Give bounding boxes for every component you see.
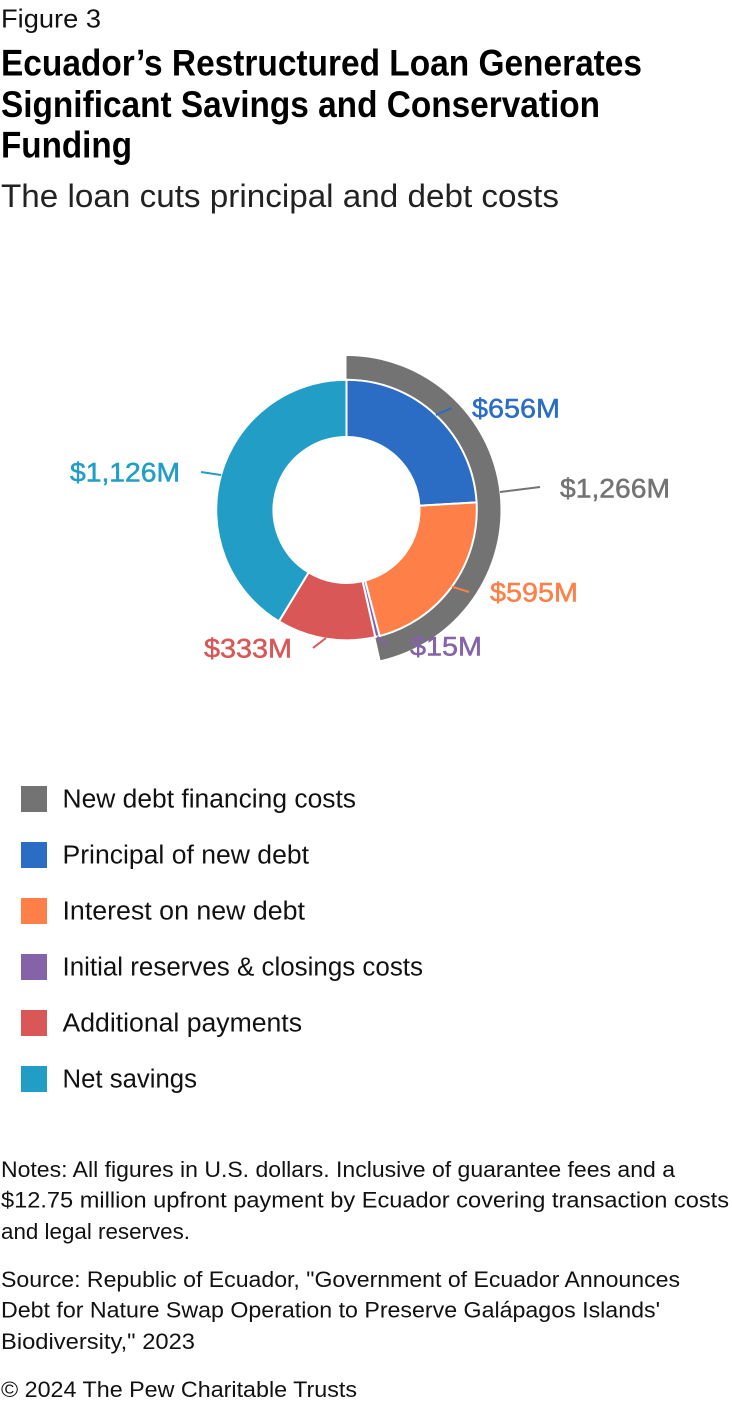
value: net savings: $1,126M	[70, 458, 180, 488]
segment: principal of new debt	[346, 380, 477, 506]
title: Significant Savings and Conservation	[1, 84, 600, 125]
value: principal: $656M	[472, 394, 560, 424]
legend item: net savings: Net savings	[62, 1066, 197, 1094]
notes: $12.75 million upfront payment by Ecuador covering transaction costs	[1, 1188, 729, 1212]
legend item: reserves: Initial reserves & closings costs	[62, 954, 423, 982]
legend item: principal: Principal of new debt	[62, 842, 309, 870]
notes: Notes: All figures in U.S. dollars. Inclusive of guarantee fees and a	[1, 1157, 676, 1182]
segment: net savings	[216, 380, 346, 621]
source: Source: Republic of Ecuador, "Government of Ecuador Announces	[1, 1267, 680, 1292]
donut chart	[70, 356, 670, 664]
value: additional payments: $333M	[204, 634, 292, 664]
legend item: new debt financing costs: New debt financing costs	[62, 786, 356, 814]
outer ring: new debt financing costs	[346, 356, 501, 660]
source	[1, 1267, 680, 1354]
value: financing costs: $1,266M	[560, 474, 670, 504]
leader line: principal	[436, 408, 452, 415]
legend item: interest: Interest on new debt	[62, 898, 305, 926]
leader line: interest	[452, 587, 469, 592]
leader line: financing costs	[500, 487, 540, 492]
title: Funding	[1, 124, 132, 166]
notes	[1, 1157, 729, 1244]
segment: interest on new debt	[365, 502, 477, 636]
source: Debt for Nature Swap Operation to Preserve Galápagos Islands'	[1, 1298, 660, 1322]
title: Ecuador’s Restructured Loan Generates	[1, 42, 642, 84]
copyright: © 2024 The Pew Charitable Trusts	[1, 1377, 357, 1402]
title	[1, 42, 642, 166]
legend item: additional payments: Additional payments	[62, 1010, 302, 1038]
value: reserves: $15M	[410, 632, 482, 662]
leader line: net savings	[201, 472, 221, 475]
source: Biodiversity," 2023	[1, 1329, 195, 1354]
figure label: Figure 3	[1, 4, 101, 34]
segment: additional payments	[279, 572, 375, 640]
leader line: reserves	[377, 637, 389, 646]
legend	[21, 786, 423, 1094]
segment: initial reserves and closing costs	[363, 581, 380, 637]
subtitle: The loan cuts principal and debt costs	[1, 178, 559, 214]
notes: and legal reserves.	[1, 1219, 190, 1244]
value: interest: $595M	[490, 578, 578, 608]
leader line: additional payments	[313, 638, 326, 648]
